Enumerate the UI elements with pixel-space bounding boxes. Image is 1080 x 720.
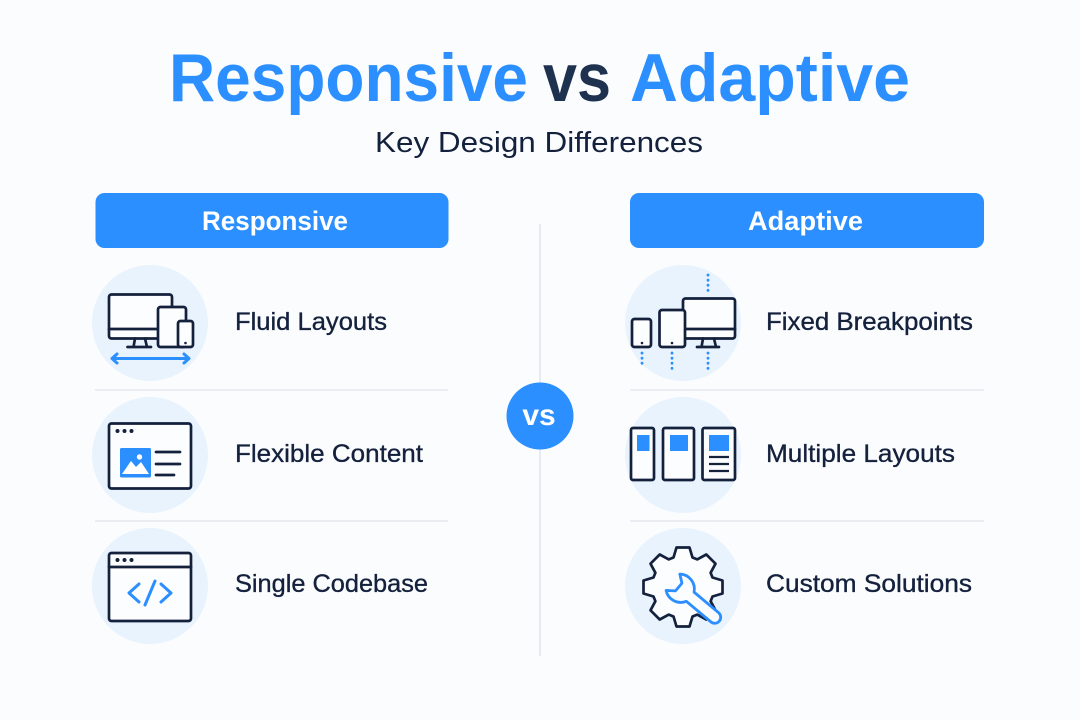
- icon: flexible content: [92, 397, 208, 513]
- adaptive header: [630, 193, 984, 248]
- icon: fixed breakpoints: [625, 265, 741, 381]
- responsive header: Responsive: [202, 206, 348, 236]
- label: multiple layouts: Multiple Layouts: [766, 440, 955, 468]
- responsive header: [96, 193, 448, 248]
- title: vs: [543, 40, 611, 116]
- panel: responsive: [92, 193, 448, 644]
- label: fixed breakpoints: Fixed Breakpoints: [766, 308, 973, 336]
- icon: multiple layouts: [625, 397, 741, 513]
- center divider line: [539, 224, 541, 656]
- label: custom solutions: Custom Solutions: [766, 570, 972, 598]
- panel: adaptive: [625, 193, 984, 644]
- title: Adaptive: [630, 40, 910, 116]
- icon: fluid layouts devices: [92, 265, 208, 381]
- vs badge: [506, 382, 574, 450]
- label: flexible content: Flexible Content: [235, 440, 423, 468]
- label: fluid layouts: Fluid Layouts: [235, 308, 387, 336]
- title: [169, 40, 910, 116]
- title: Responsive: [169, 40, 528, 116]
- label: single codebase: Single Codebase: [235, 570, 428, 598]
- subtitle: Key Design Differences: [375, 127, 703, 159]
- adaptive header: Adaptive: [748, 206, 863, 236]
- icon: single codebase: [92, 528, 208, 644]
- vs badge: vs: [522, 399, 556, 432]
- icon: gear and wrench: [625, 528, 741, 644]
